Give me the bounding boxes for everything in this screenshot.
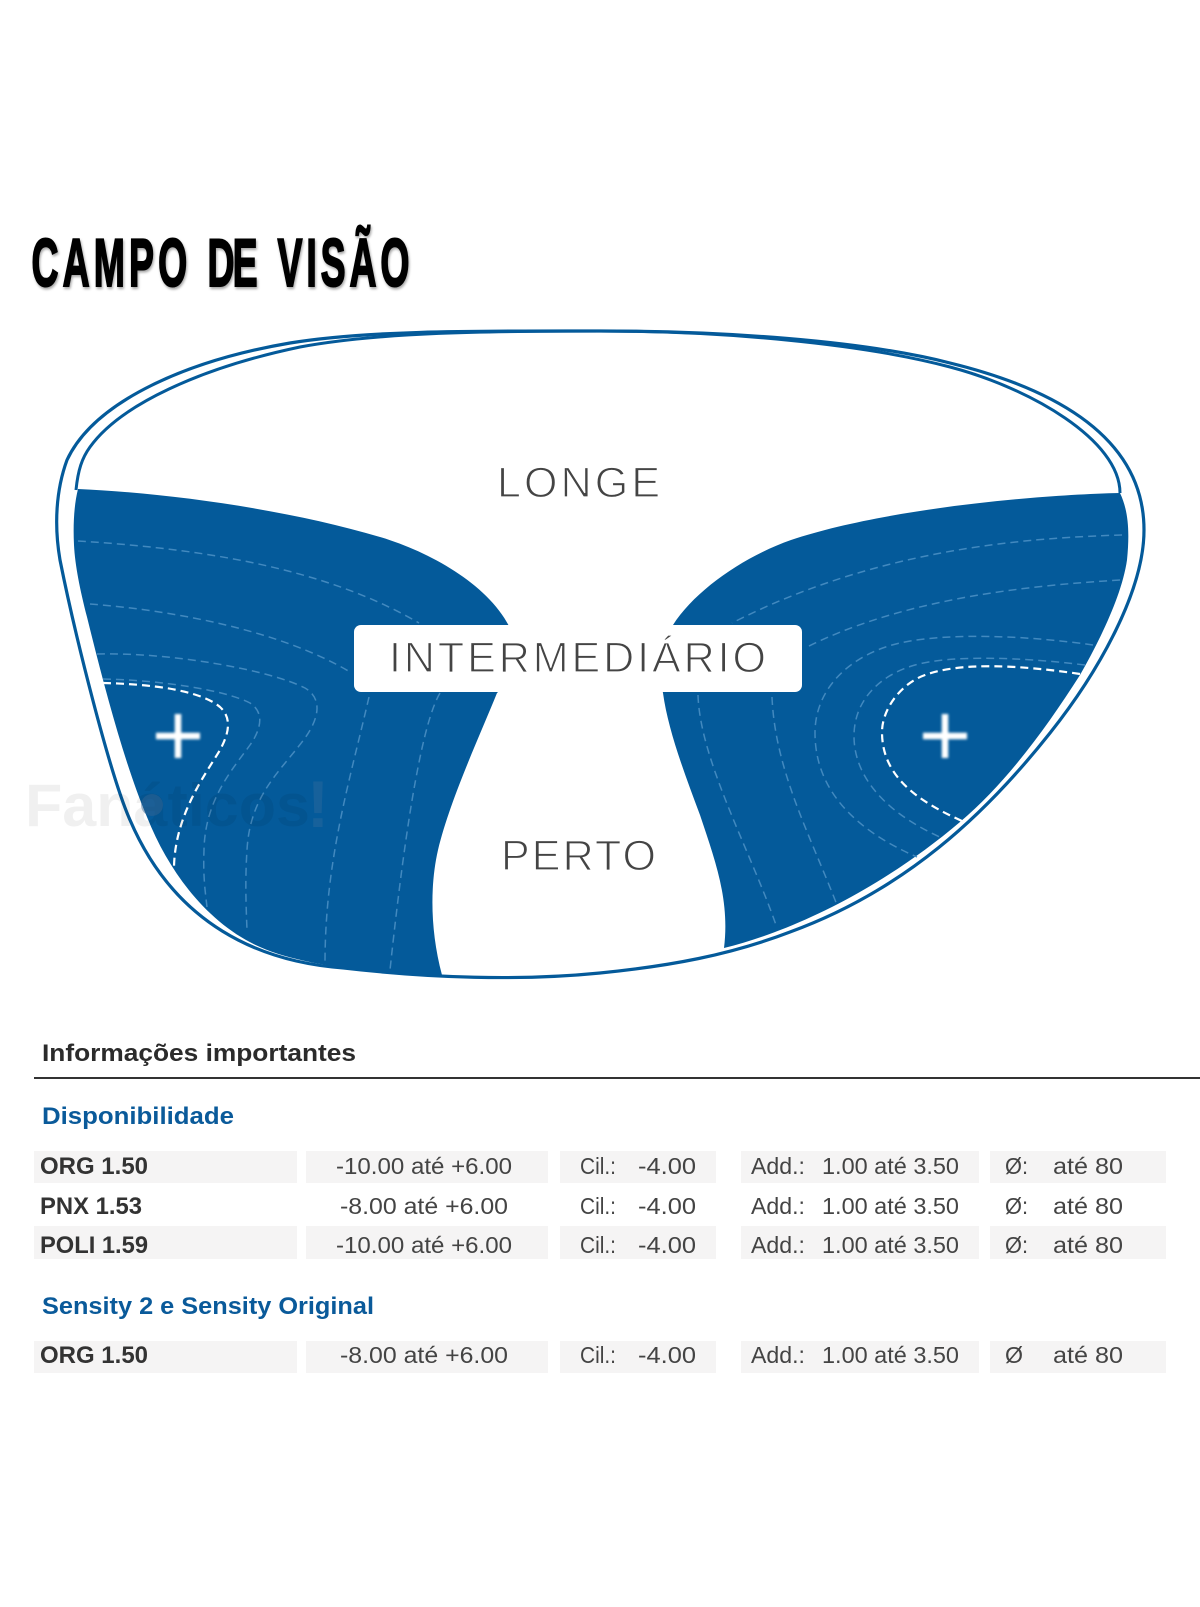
lens diagram	[57, 331, 1144, 978]
table row: ORG 1.50: até 80	[1053, 1153, 1123, 1179]
table row: ORG 1.50: -10.00 até +6.00	[336, 1153, 512, 1179]
title: DE	[208, 224, 258, 301]
left dashed contour lines	[78, 541, 440, 970]
table row: sensity ORG 1.50: Add.:	[751, 1342, 805, 1368]
table row: ORG 1.50	[34, 1151, 1166, 1183]
title: VISÃO	[278, 224, 409, 301]
table row: POLI 1.59: -4.00	[638, 1232, 696, 1258]
table row: ORG 1.50: Ø:	[1005, 1153, 1028, 1179]
heading: sensity: Sensity 2 e Sensity Original	[42, 1293, 374, 1320]
label box: intermediario	[354, 625, 802, 692]
table row: PNX 1.53: Add.:	[751, 1193, 805, 1219]
table row: PNX 1.53: até 80	[1053, 1193, 1123, 1219]
table row: PNX 1.53: 1.00 até 3.50	[822, 1193, 959, 1219]
table row: sensity ORG 1.50: -4.00	[638, 1342, 696, 1368]
table row: POLI 1.59: 1.00 até 3.50	[822, 1232, 959, 1258]
icon: left plus	[156, 714, 200, 758]
table row: ORG 1.50: -4.00	[638, 1153, 696, 1179]
table row: ORG 1.50: ORG 1.50	[40, 1153, 148, 1180]
watermark: Fanáticos	[25, 772, 310, 839]
title	[32, 224, 410, 301]
table row: POLI 1.59: Cil.:	[580, 1232, 616, 1258]
label: longe: LONGE	[497, 459, 660, 507]
icon: right plus	[923, 714, 967, 758]
table row: PNX 1.53: PNX 1.53	[40, 1193, 142, 1220]
table row: PNX 1.53: -8.00 até +6.00	[340, 1193, 508, 1219]
table row: PNX 1.53: Ø:	[1005, 1193, 1028, 1219]
left blue zone	[74, 489, 511, 975]
table row: sensity ORG 1.50: -8.00 até +6.00	[340, 1342, 508, 1368]
table row: POLI 1.59: Add.:	[751, 1232, 805, 1258]
table row: ORG 1.50: Cil.:	[580, 1153, 616, 1179]
table row: ORG 1.50: Add.:	[751, 1153, 805, 1179]
watermark: !	[307, 767, 329, 841]
table row: sensity ORG 1.50: Ø	[1005, 1342, 1023, 1368]
right blue zone	[660, 493, 1128, 948]
table row: POLI 1.59: até 80	[1053, 1232, 1123, 1258]
table row: PNX 1.53: Cil.:	[580, 1193, 616, 1219]
lens outer frame	[57, 331, 1144, 978]
table row: POLI 1.59: -10.00 até +6.00	[336, 1232, 512, 1258]
table row: sensity ORG 1.50: ORG 1.50	[40, 1342, 148, 1369]
label box: intermediario: INTERMEDIÁRIO	[389, 634, 766, 682]
table row: ORG 1.50: 1.00 até 3.50	[822, 1153, 959, 1179]
table row: PNX 1.53	[40, 1193, 1123, 1220]
table row: sensity ORG 1.50: Cil.:	[580, 1342, 616, 1368]
table row: sensity ORG 1.50	[34, 1341, 1166, 1373]
table row: sensity ORG 1.50: 1.00 até 3.50	[822, 1342, 959, 1368]
table row: POLI 1.59: Ø:	[1005, 1232, 1028, 1258]
label: perto: PERTO	[501, 832, 656, 880]
heading: disponibilidade: Disponibilidade	[42, 1103, 234, 1130]
table row: POLI 1.59: POLI 1.59	[40, 1232, 148, 1259]
title: CAMPO	[32, 224, 187, 301]
table row: POLI 1.59	[34, 1226, 1166, 1259]
right dashed contour lines	[698, 535, 1122, 925]
table row: PNX 1.53: -4.00	[638, 1193, 696, 1219]
table row: sensity ORG 1.50: até 80	[1053, 1342, 1123, 1368]
heading: informacoes importantes: Informações importantes	[42, 1040, 356, 1067]
lens inner frame	[76, 331, 1120, 493]
